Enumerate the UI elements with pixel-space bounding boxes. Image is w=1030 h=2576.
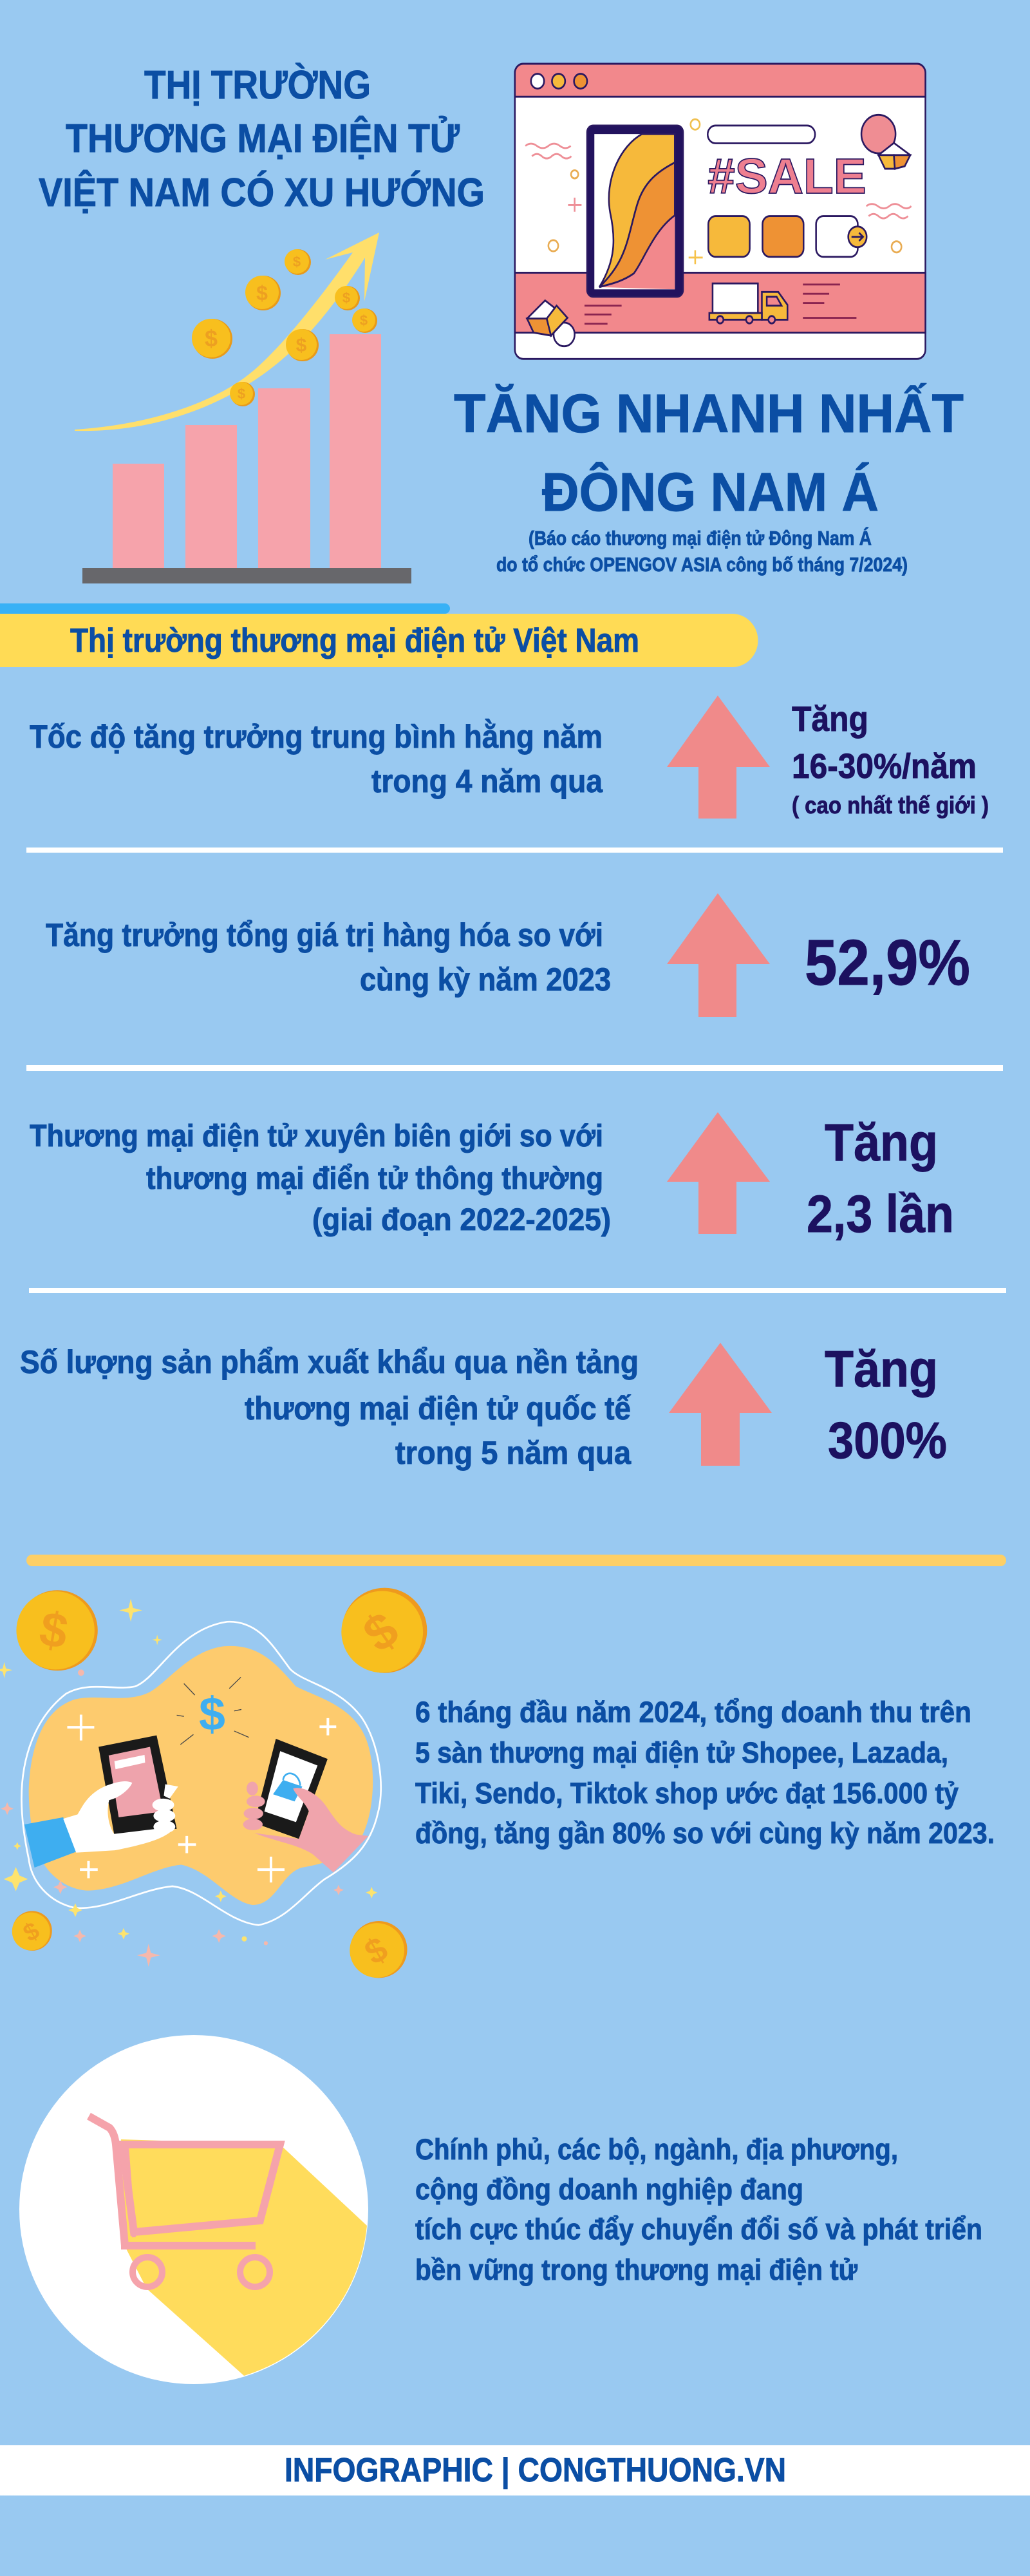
- coins: $: [360, 312, 368, 328]
- row 2 label: cùng kỳ năm 2023: [360, 961, 611, 998]
- heading: fastest growth: [454, 383, 964, 522]
- text block: government support: tích cực thúc đẩy chuyển đổi số và phát triển: [415, 2213, 982, 2246]
- row 2 label: Tăng trưởng tổng giá trị hàng hóa so với: [46, 917, 603, 953]
- delivery truck: [709, 283, 787, 323]
- text block: government support: Chính phủ, các bộ, ngành, địa phương,: [415, 2133, 898, 2166]
- row 1 arrow: [667, 696, 770, 819]
- bars: [113, 334, 381, 568]
- white outline: [21, 1622, 381, 1925]
- row 4 label: [20, 1344, 639, 1471]
- sparkle stars: [0, 1599, 377, 1942]
- row 1 value: ( cao nhất thế giới ): [792, 792, 989, 819]
- title: top left heading: VIỆT NAM CÓ XU HƯỚNG: [39, 171, 485, 215]
- icon: shopping cart in white circle: [19, 2035, 368, 2384]
- row 1 label: trong 4 năm qua: [371, 763, 603, 799]
- growth arrow: [75, 232, 379, 431]
- coin top right: [341, 1588, 427, 1673]
- box with circle: [527, 301, 575, 346]
- coins: $: [256, 281, 268, 305]
- row 2 value: 52,9%: [805, 927, 970, 999]
- row 3 value: 2,3 lần: [807, 1185, 954, 1244]
- yellow pill: [0, 614, 758, 667]
- section header: blue bar and yellow pill: [0, 603, 758, 667]
- dollar sign with rays: [177, 1677, 249, 1745]
- text block: government support: bền vững trong thương mại điện tử: [415, 2253, 857, 2286]
- heading: fastest growth: TĂNG NHANH NHẤT: [454, 383, 964, 444]
- sale label: #SALE: [707, 149, 866, 204]
- row 3 value: Tăng: [825, 1113, 938, 1172]
- window dots: [531, 74, 587, 89]
- white circle: [19, 2035, 368, 2384]
- coin bottom left: [12, 1911, 52, 1951]
- row 3 arrow: [667, 1112, 770, 1234]
- source note: (Báo cáo thương mại điện tử Đông Nam Á: [529, 527, 872, 549]
- coin bottom right: $: [359, 1930, 394, 1973]
- row 1 value: Tăng: [792, 699, 868, 739]
- text block: revenue: [415, 1696, 995, 1850]
- title: top left heading: THỊ TRƯỜNG: [144, 63, 371, 108]
- row 1 label: [30, 719, 603, 799]
- row 4 value: Tăng: [825, 1340, 938, 1397]
- row 3 value: [807, 1113, 954, 1244]
- right phone in pink hand: [243, 1739, 368, 1873]
- coins: $: [238, 386, 245, 402]
- dollar sign with rays: $: [199, 1687, 225, 1741]
- heading: fastest growth: ĐÔNG NAM Á: [542, 462, 879, 522]
- text block: government support: cộng đồng doanh nghiệp đang: [415, 2173, 803, 2206]
- chart base: [82, 568, 411, 583]
- illustration: online sale browser window: [515, 64, 926, 359]
- source note: do tổ chức OPENGOV ASIA công bố tháng 7/2024): [496, 553, 908, 576]
- white plus sparkles: [67, 1714, 336, 1882]
- coin bottom right: [350, 1921, 407, 1978]
- text block: revenue: 6 tháng đầu năm 2024, tổng doanh thu trên: [415, 1696, 971, 1728]
- footer band: [0, 2445, 1030, 2496]
- row 4: exported products: [20, 1340, 947, 1471]
- chart: rising bars with arrow and coins: [75, 232, 411, 583]
- title: top left heading: [39, 63, 485, 215]
- title: top left heading: THƯƠNG MẠI ĐIỆN TỬ: [66, 117, 460, 161]
- source note: [496, 527, 908, 576]
- row 3: cross-border e-commerce: [30, 1112, 954, 1244]
- row 4 label: trong 5 năm qua: [395, 1435, 632, 1471]
- row 1 label: Tốc độ tăng trưởng trung bình hằng năm: [30, 719, 603, 755]
- window header: [515, 64, 926, 97]
- row 3 label: thương mại điển tử thông thường: [146, 1162, 603, 1196]
- yellow blob: [29, 1646, 373, 1905]
- row 3 label: Thương mại điện tử xuyên biên giới so với: [30, 1119, 603, 1153]
- row 1: average annual growth: [30, 696, 989, 819]
- coins: $: [296, 335, 307, 356]
- window frame: [515, 64, 926, 359]
- coin top left: [16, 1590, 98, 1671]
- row 4 arrow: [669, 1343, 772, 1466]
- row 3 label: (giai đoạn 2022-2025): [312, 1203, 611, 1237]
- text block: revenue: 5 sàn thương mại điện tử Shopee, Lazada,: [415, 1736, 948, 1769]
- coins: [192, 249, 377, 406]
- row 3 label: [30, 1119, 611, 1237]
- text block: revenue: Tiki, Sendo, Tiktok shop ước đạt 156.000 tỷ: [415, 1777, 959, 1810]
- coin top left: $: [35, 1601, 72, 1660]
- row 4 value: 300%: [828, 1412, 947, 1469]
- text lines: [585, 285, 856, 324]
- row 2 arrow: [667, 893, 770, 1017]
- coin top right: $: [353, 1600, 408, 1663]
- row 4 label: thương mại điện tử quốc tế: [245, 1390, 631, 1426]
- product squares: [708, 216, 866, 257]
- row 1 value: [792, 699, 989, 819]
- search bar: [707, 126, 815, 143]
- section title: Thị trường thương mại điện tử Việt Nam: [70, 622, 639, 659]
- row 4 label: Số lượng sản phẩm xuất khẩu qua nền tảng: [20, 1344, 639, 1380]
- coins: $: [342, 290, 350, 306]
- row 1 value: 16-30%/năm: [792, 747, 977, 786]
- pink circle with cube: [861, 115, 910, 169]
- coins: $: [293, 254, 301, 270]
- coin bottom left: $: [19, 1917, 44, 1947]
- row 2: total goods value growth: [46, 893, 970, 1017]
- pink band: [515, 272, 926, 332]
- left phone in white hand: [24, 1736, 178, 1868]
- coins: $: [205, 325, 218, 352]
- phone showing flame graphic: [587, 126, 683, 297]
- long shadow: [121, 2139, 367, 2376]
- cart frame: [89, 2116, 280, 2287]
- footer text: INFOGRAPHIC | CONGTHUONG.VN: [285, 2452, 786, 2489]
- wavy lines and small accents: [525, 119, 912, 264]
- illustration: mobile payment with coins: [0, 1588, 427, 1978]
- row 2 label: [46, 917, 611, 998]
- row 4 value: [825, 1340, 947, 1469]
- text block: government support: [415, 2133, 982, 2286]
